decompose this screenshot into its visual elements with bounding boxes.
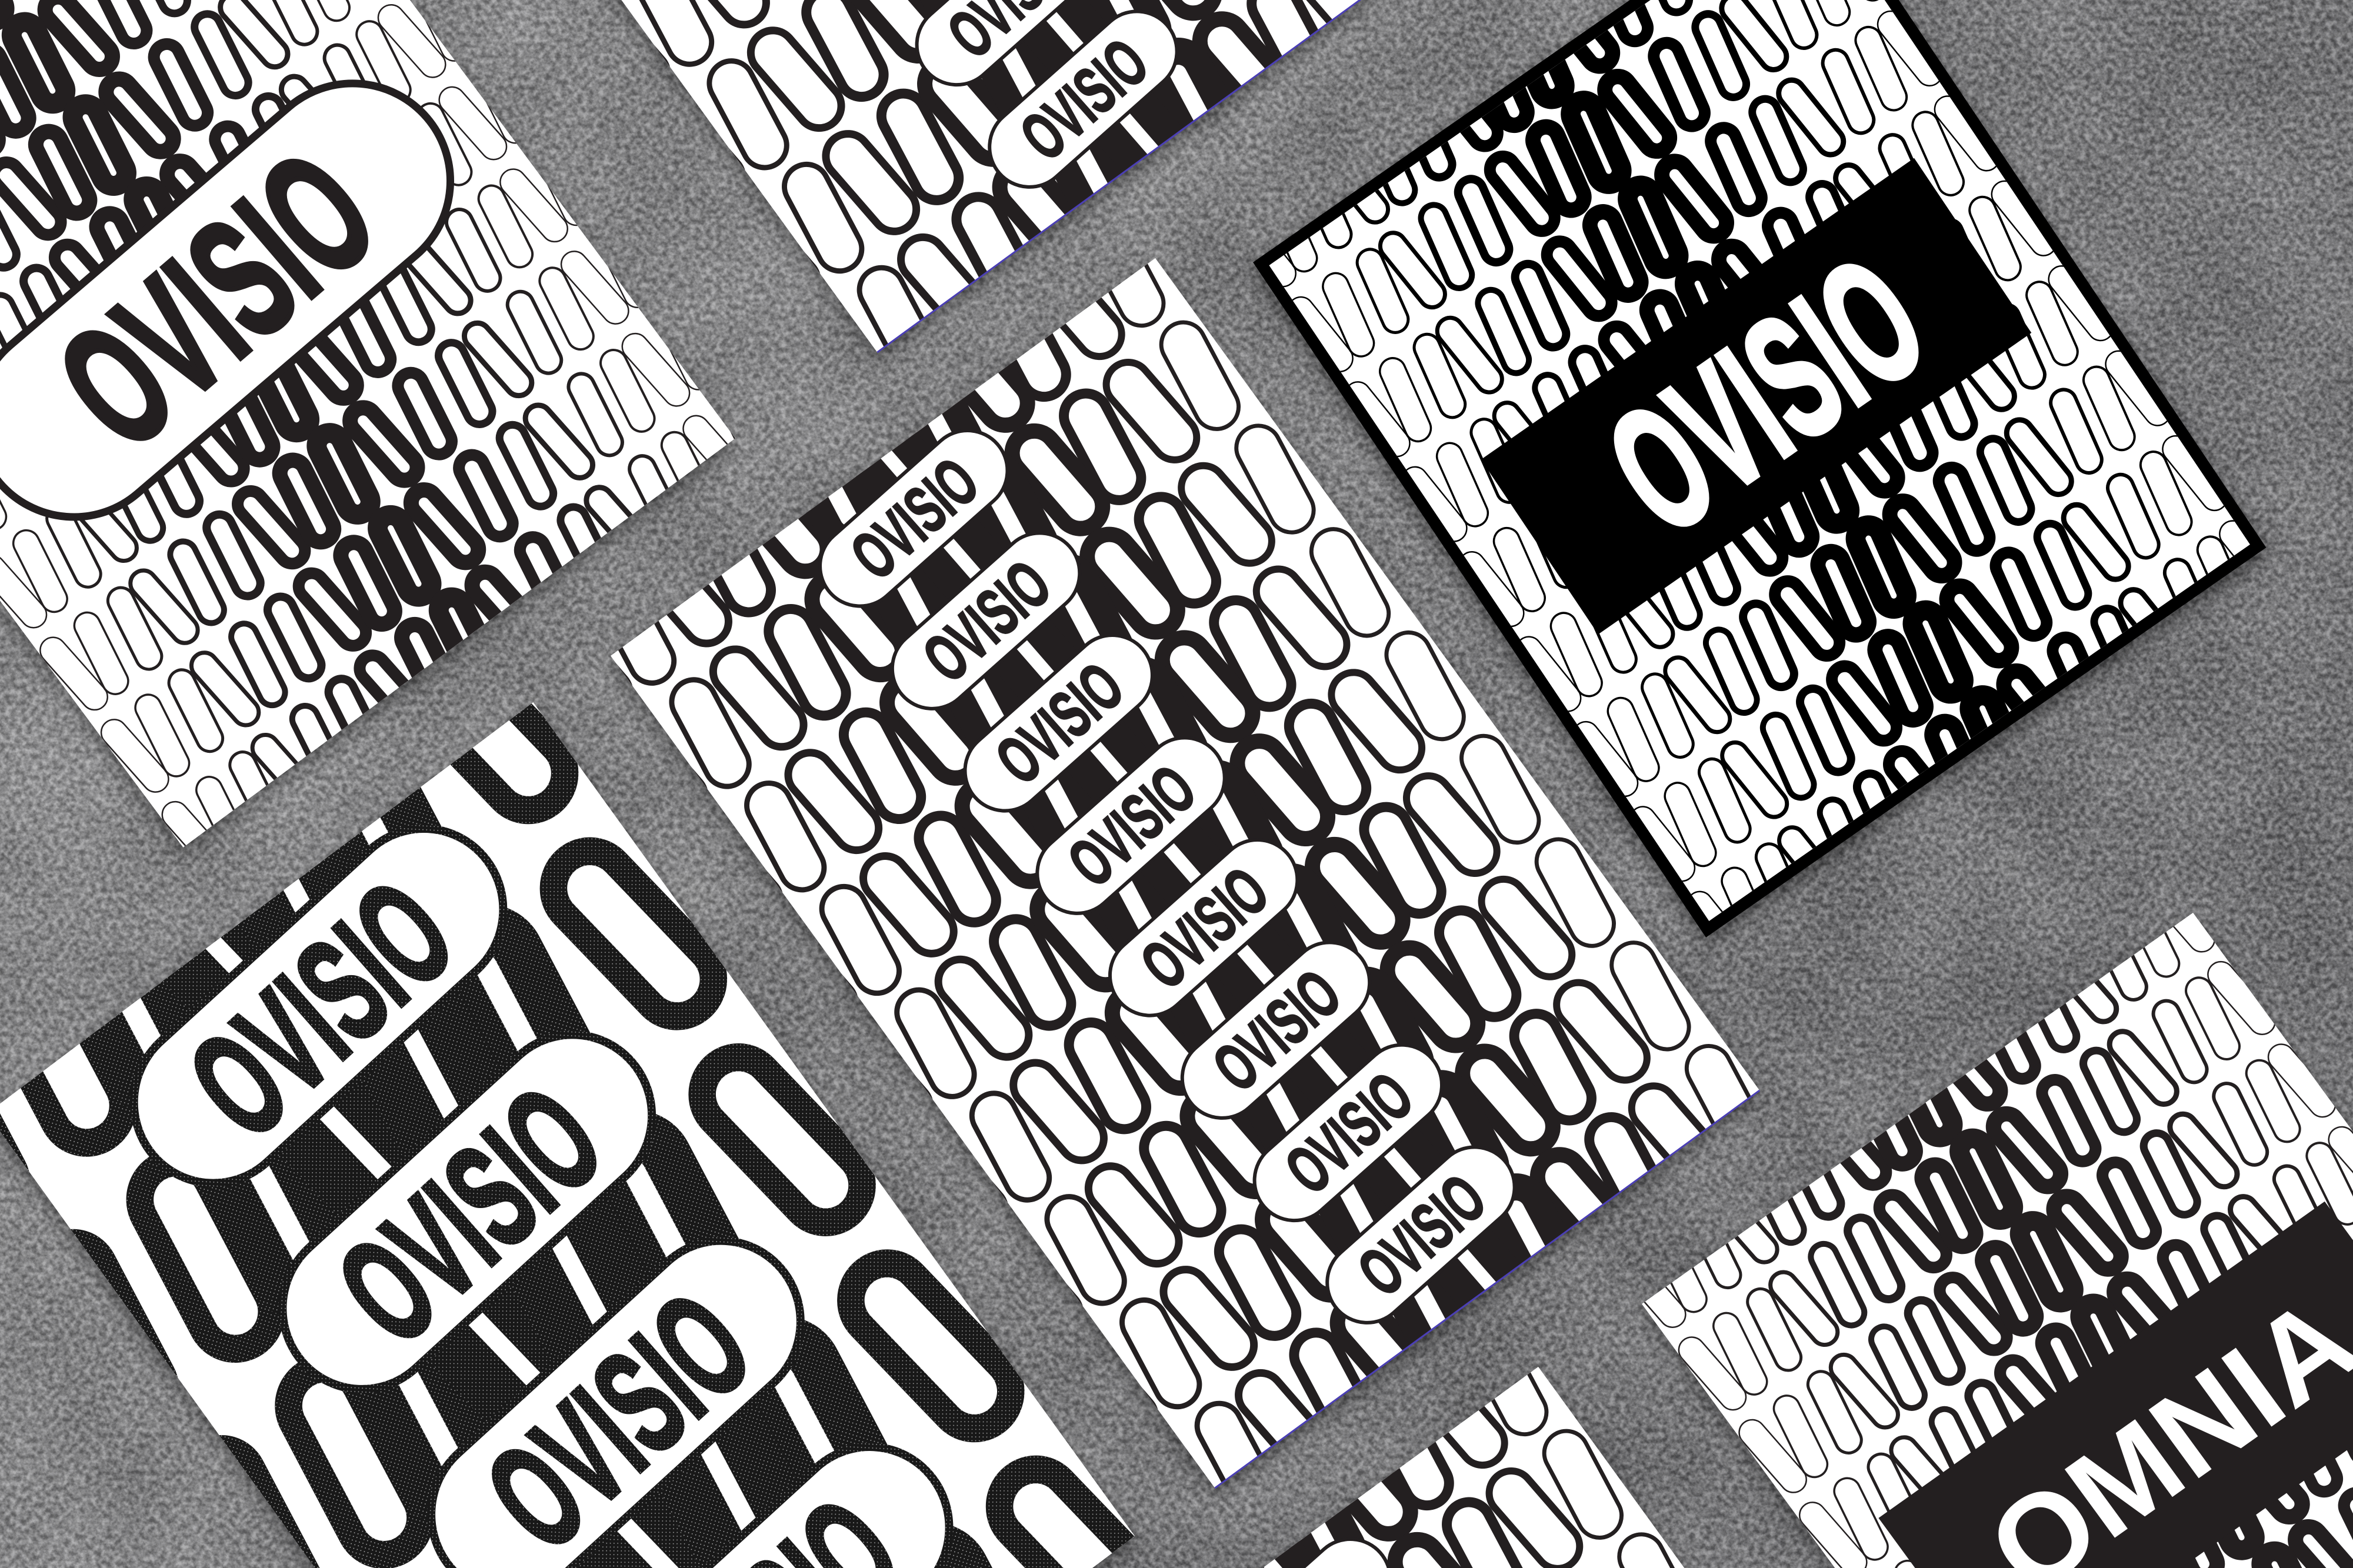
stack of eight pill banners: OVISIO — [909, 546, 1065, 696]
stack of eight pill banners: OVISIO — [982, 648, 1138, 799]
stack of eight pill banners — [782, 409, 1552, 1344]
pill banner — [901, 0, 1121, 101]
stack of eight pill banners: OVISIO — [1199, 956, 1355, 1106]
stack of large pill banners: OVISIO — [159, 849, 483, 1169]
ring pattern — [1224, 0, 2353, 1146]
poster: bottom centre, cropped by the page edge — [913, 1281, 2214, 1568]
stack of eight pill banners: OVISIO — [1344, 1160, 1500, 1310]
black band with title: OVISIO — [1576, 219, 1957, 571]
stack of eight pill banners: OVISIO — [1272, 1058, 1427, 1209]
poster: top-right framed OVISIO with black band — [1222, 0, 2353, 1147]
stack of eight pill banners: OVISIO — [1127, 853, 1282, 1003]
black band with title — [1481, 158, 2031, 634]
enlarged halftone ring pattern — [0, 613, 1181, 1568]
pill banner with title — [0, 44, 491, 558]
stack of large pill banners: OVISIO — [457, 1261, 781, 1568]
poster: top centre, cropped by the page edge — [607, 0, 1385, 363]
ring pattern — [1611, 846, 2353, 1568]
stack of large pill banners — [76, 785, 1012, 1568]
poster: bottom-left halftone with large pills — [0, 610, 1184, 1568]
ring pattern — [192, 0, 1493, 421]
ring pattern — [913, 1281, 2214, 1568]
poster: bottom-right OMNIA with dark band — [1609, 846, 2353, 1568]
poster: top-left OVISIO with large pill — [0, 0, 789, 886]
stack of eight pill banners: OVISIO — [1054, 751, 1210, 901]
pill banner — [1187, 1523, 1407, 1568]
dark band with title — [1878, 1202, 2353, 1568]
pill banner — [973, 0, 1194, 203]
stack of large pill banners: OVISIO — [308, 1055, 632, 1376]
ring pattern — [0, 0, 789, 885]
stack of eight pill banners: OVISIO — [837, 443, 992, 594]
poster: centre with stacked pill banners — [530, 172, 1831, 1557]
ring pattern — [530, 172, 1831, 1557]
